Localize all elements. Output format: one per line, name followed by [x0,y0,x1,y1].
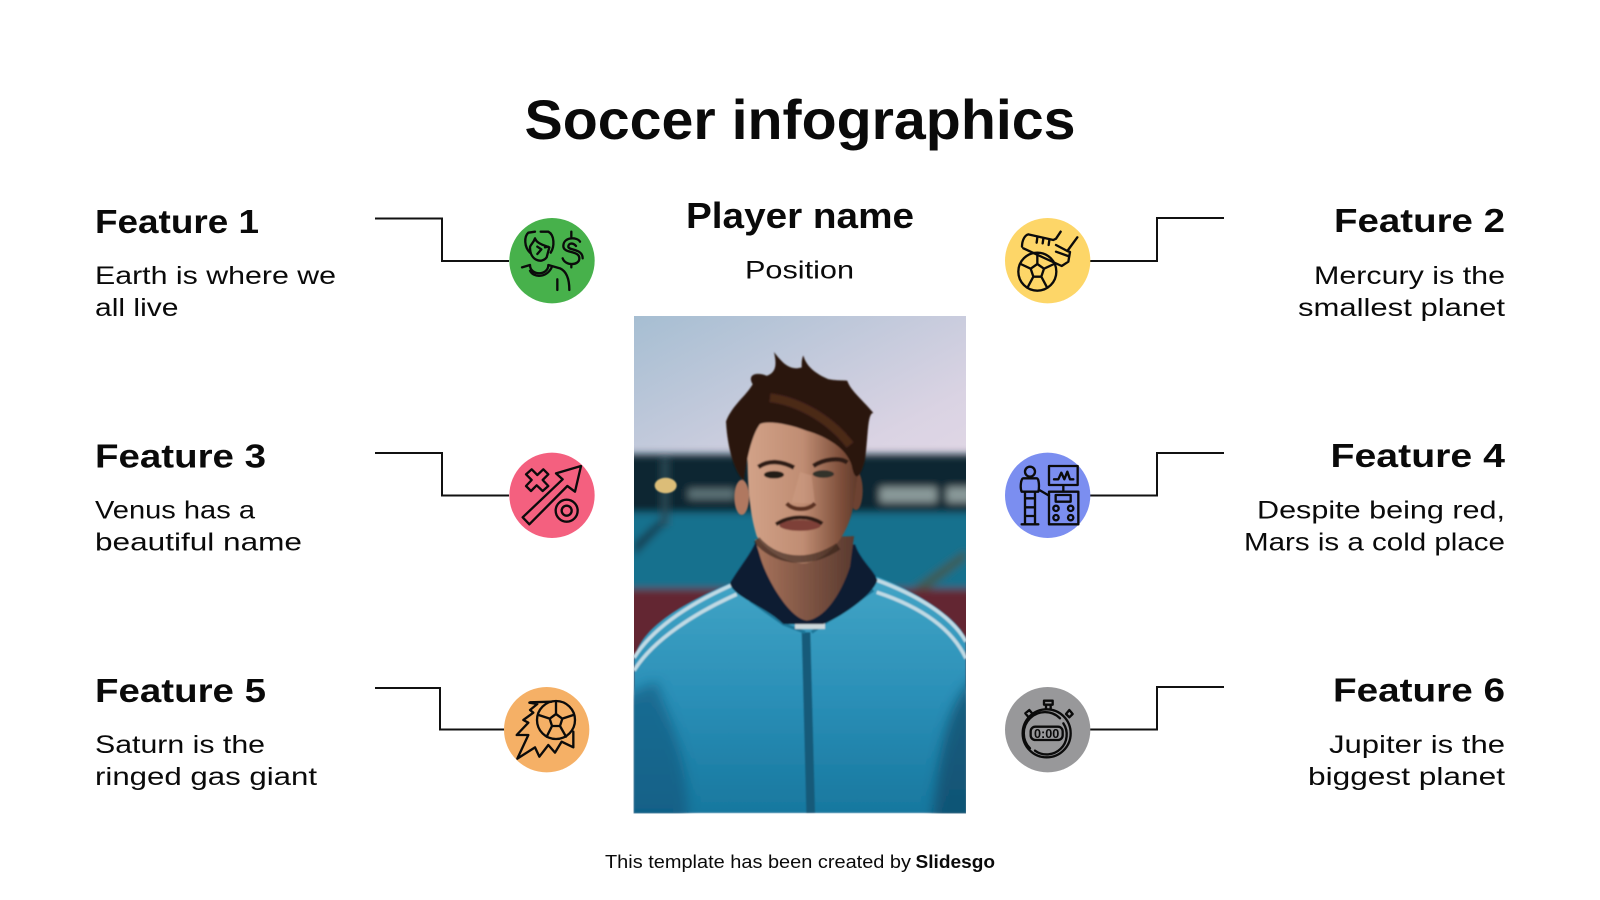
heading: Feature 3 [95,438,266,474]
footer credit: This template has been created by [605,852,911,872]
description: Mercury is the [1314,262,1505,290]
heading: Feature 1 [95,203,259,240]
panel: feature 1 [95,203,595,322]
icon: tactics arrow [509,453,595,538]
description: Venus has a [95,496,255,524]
description: biggest planet [1308,763,1505,791]
connector [1090,453,1224,496]
icon: boot on ball [1005,218,1090,303]
player position: Position [745,256,854,284]
icon: stopwatch [1005,687,1090,772]
description [95,731,317,791]
icon: stopwatch: 0:00 [1034,727,1059,741]
heading: Feature 2 [1334,202,1505,239]
footer credit: Slidesgo [916,852,995,872]
panel: feature 3 [95,438,595,556]
panel: feature 5 [95,672,589,791]
heading: Feature 4 [1330,437,1506,474]
heading: Feature 6 [1333,672,1505,708]
description: Earth is where we [95,262,336,290]
connector [1090,218,1224,261]
description [1298,262,1505,322]
description: smallest planet [1298,294,1505,322]
panel: feature 6 [1005,672,1505,791]
description [95,496,302,556]
connector [375,688,504,730]
player name: Player name [686,195,914,236]
description: Jupiter is the [1329,731,1505,759]
panel: feature 2 [1005,202,1505,322]
connector [1090,687,1224,730]
icon: player with dollar [509,218,595,303]
connector [375,218,509,261]
photo: player portrait [620,316,980,827]
description: Saturn is the [95,731,265,759]
description [1244,496,1505,556]
description [1308,731,1505,791]
description: ringed gas giant [95,763,317,791]
connector [375,453,509,496]
icon: fireball [504,687,589,772]
description: beautiful name [95,528,302,556]
panel: feature 4 [1005,437,1506,556]
description: all live [95,294,178,322]
description: Despite being red, [1257,496,1505,524]
heading: Feature 5 [95,672,266,709]
icon: player analysis [1005,453,1090,538]
description [95,262,336,322]
description: Mars is a cold place [1244,528,1505,556]
panel: player heading [686,195,914,284]
title: Soccer infographics [524,88,1076,151]
infographic canvas [95,98,1505,872]
